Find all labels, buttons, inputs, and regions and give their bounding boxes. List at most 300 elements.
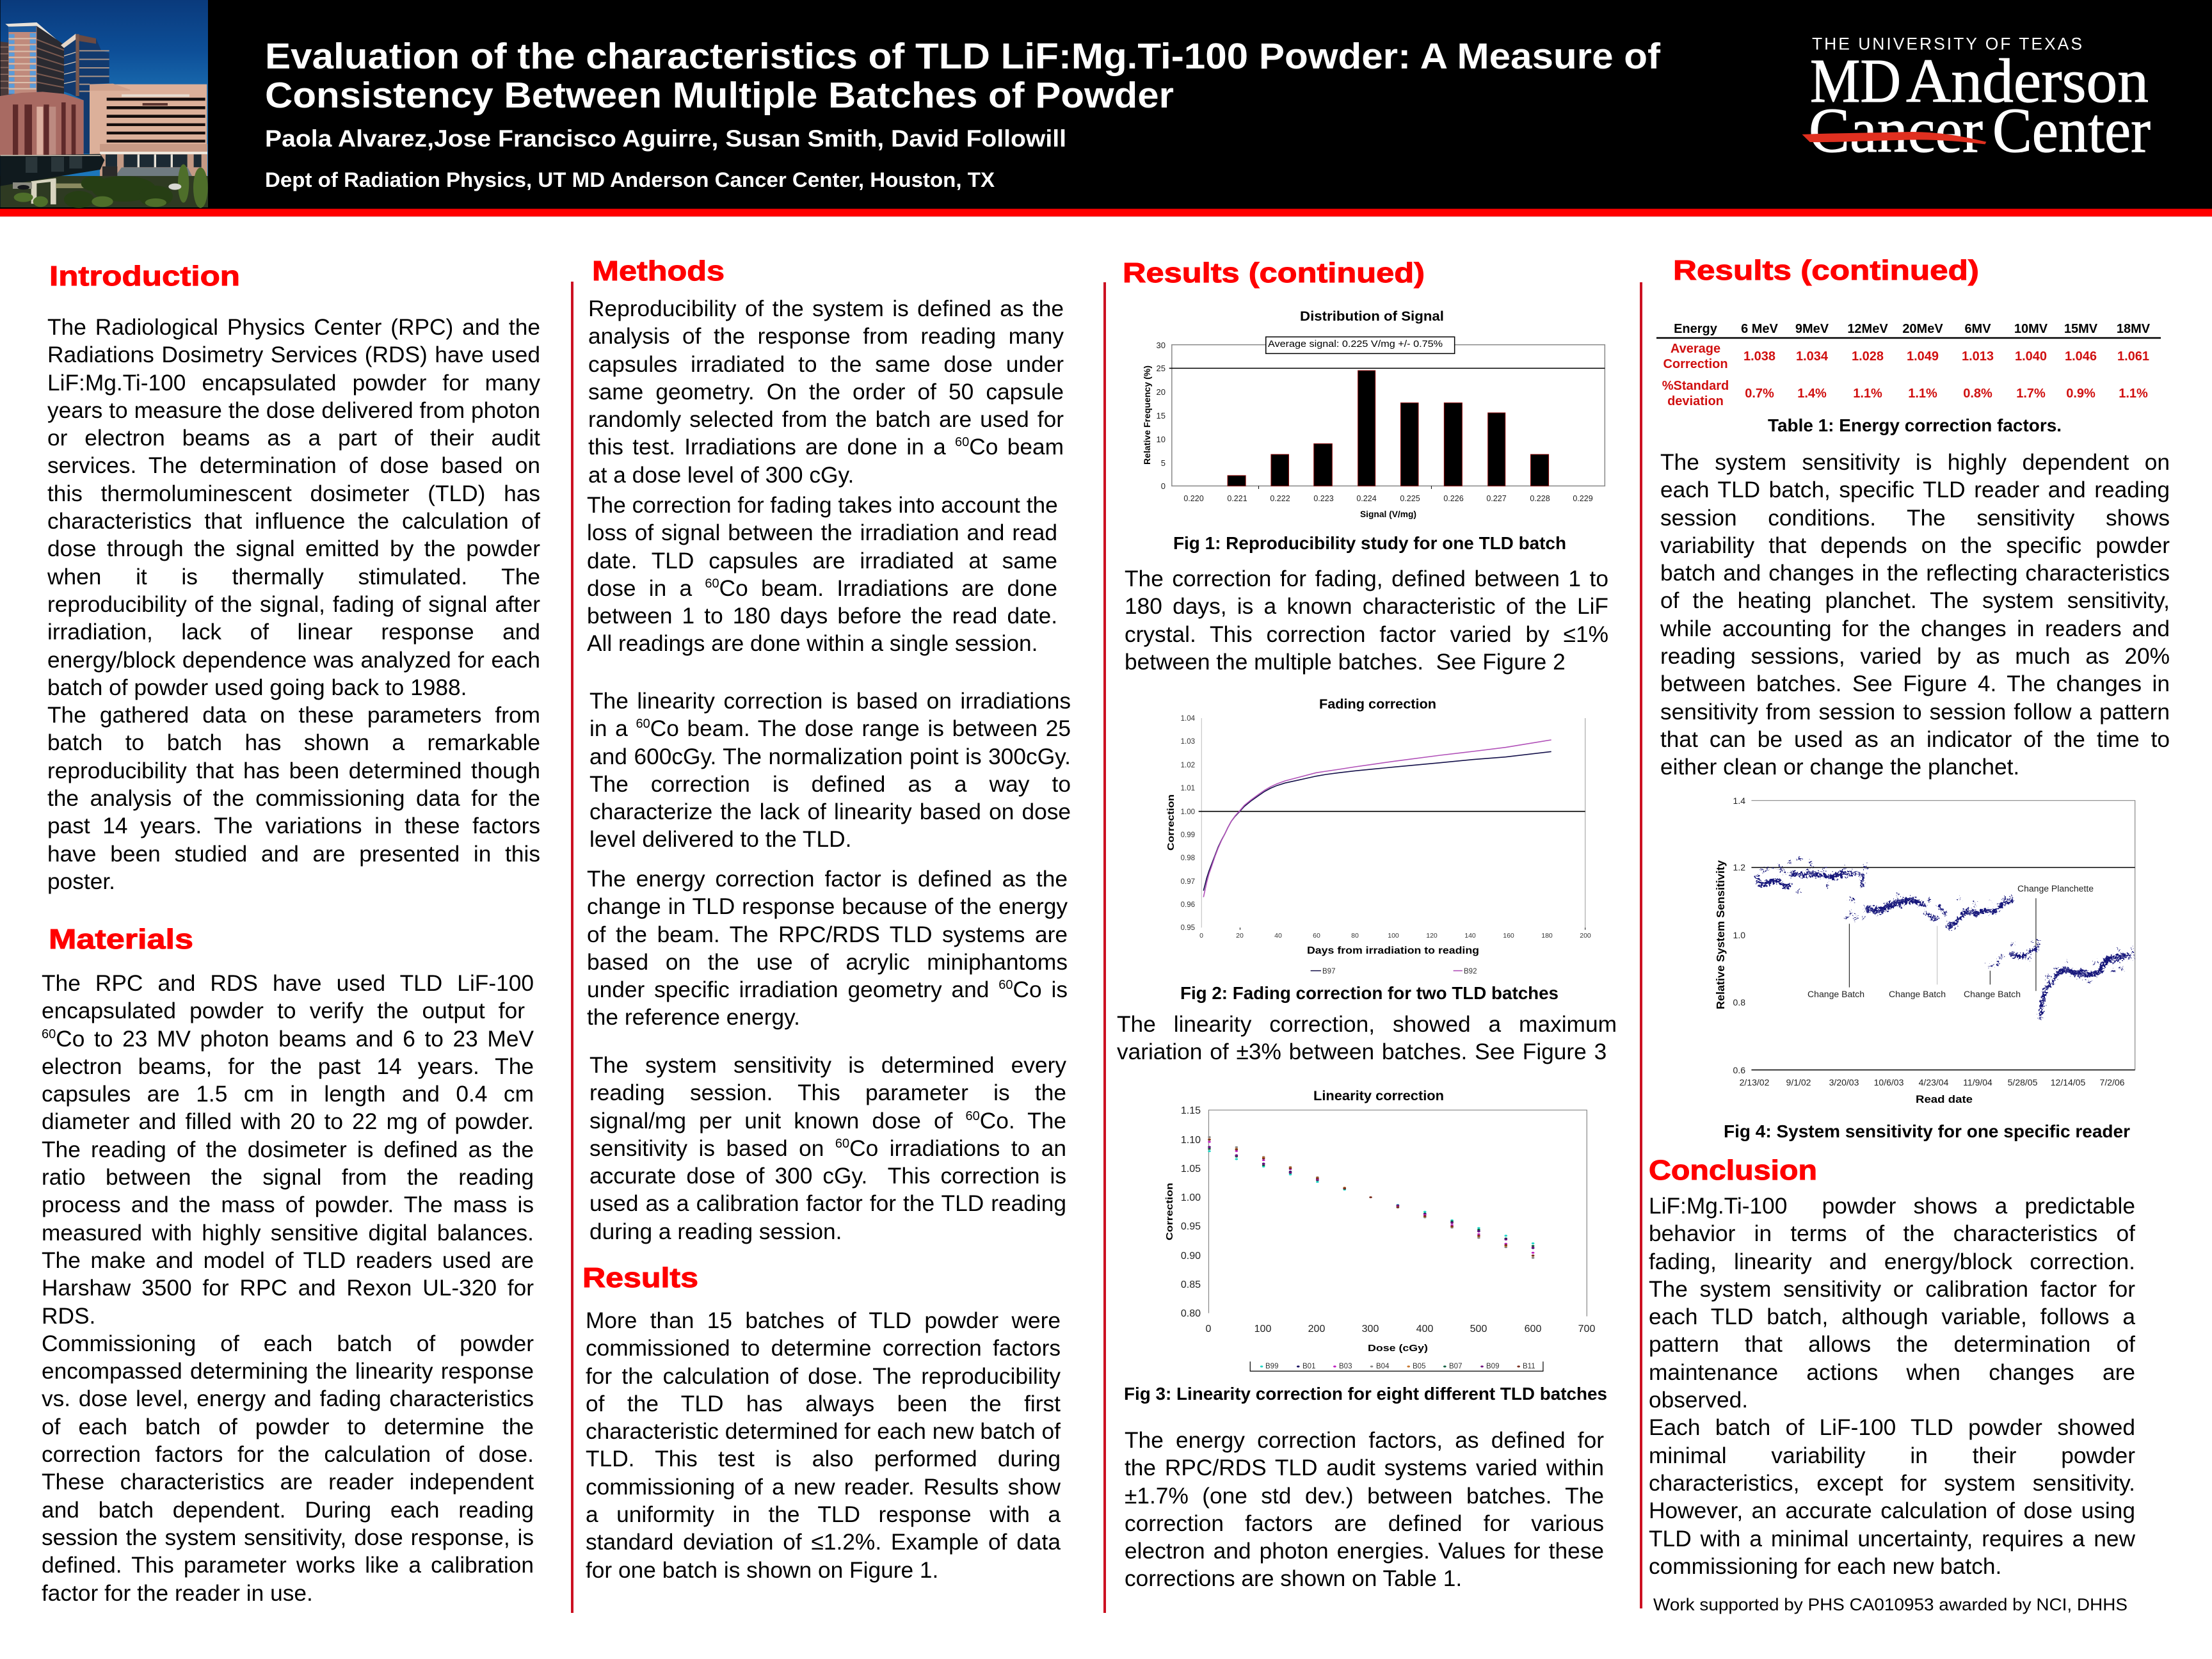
text: materials: The reading of the dosimeter is defined as the [42,1137,534,1162]
x axis labels: 20 [1236,932,1244,940]
x axis labels: 180 [1541,932,1553,940]
text: results: commissioning of a new reader. Results show [586,1475,1061,1500]
y axis labels: 15 [1157,411,1166,421]
text: energy correction note: The energy correction factors, as defined for [1125,1428,1604,1453]
text: methods, linearity: and 600cGy. The normalization point is 300cGy. [589,744,1071,769]
caption: Fig 1: Reproducibility study for one TLD batch [1173,533,1566,553]
row: percent standard deviation: 1.1% [1853,387,1882,401]
text: methods, sensitivity: accurate dose of 300 cGy. This correction is [589,1164,1066,1189]
row: percent standard deviation [1662,379,2148,408]
y axis labels: 30 [1157,341,1166,350]
footer: funding acknowledgement: Work supported by PHS CA010953 awarded by NCI, DHHS [1653,1595,2128,1614]
text: materials [42,971,534,1606]
heading: Methods: Methods [592,255,725,287]
x axis labels: 2/13/02 [1740,1077,1770,1087]
y axis labels: 1.00 [1181,808,1195,816]
table header: Energy [1674,322,1718,336]
title: Evaluation of the characteristics of TLD LiF:Mg.Ti-100 Powder: A Measure of [265,36,1661,77]
text: methods, sensitivity: during a reading session. [589,1219,842,1244]
text: system sensitivity: each TLD batch, specific TLD reader and reading [1660,477,2170,502]
y axis labels [1181,1105,1201,1319]
logo: MD Anderson Cancer Center [1802,35,2151,166]
chart title: Linearity correction [1313,1089,1444,1103]
text: methods, energy correction: of the beam. The RPC/RDS TLD systems are [587,922,1068,947]
header band [0,0,2212,209]
text: conclusion: LiF:Mg.Ti-100 powder shows a predictable [1649,1194,2135,1219]
x axis labels: 120 [1426,932,1438,940]
annotations: Change Batch [1807,990,1864,999]
text: methods, reproducibility: same geometry. On the order of 50 capsule [588,380,1064,405]
x axis labels [1740,1077,2125,1087]
legend [1322,968,1477,975]
row: percent standard deviation: deviation [1667,394,1724,408]
y axis labels: 1.4 [1733,796,1745,806]
row: average correction: 1.040 [2015,349,2047,364]
axis titles [1142,365,1416,519]
text: introduction: batch of powder used going back to 1988. [47,675,467,700]
text: methods, reproducibility: analysis of the response from reading many [588,324,1064,349]
legend: B01 [1302,1363,1315,1370]
x axis labels: 80 [1351,932,1359,940]
legend: B92 [1464,968,1477,975]
text: methods, sensitivity: The system sensitivity is determined every [589,1053,1066,1078]
text: results: for the calculation of dose. The reproducibility [586,1364,1061,1389]
text: conclusion: TLD with a minimal uncertainty, requires a new [1649,1527,2135,1551]
legend: B04 [1376,1363,1390,1370]
heading: Results (continued), column 3: Results (continued) [1123,257,1425,289]
affiliation: Dept of Radiation Physics, UT MD Anderson Cancer Center, Houston, TX [265,168,995,191]
logo: MD Anderson Cancer Center: Center [1992,95,2151,166]
divider: column 3 / 4 [1640,282,1642,1608]
x axis labels: 60 [1313,932,1320,940]
text: methods, linearity: characterize the lack of linearity based on dose [589,799,1071,824]
text: methods, linearity: in a 60Co beam. The dose range is between 25 [589,716,1071,741]
text: materials: process and the mass of powder. The mass is [42,1192,534,1217]
text: system sensitivity: sensitivity from session to session follow a pattern [1660,700,2170,725]
text: methods, fading: All readings are done within a single session. [587,631,1038,656]
x axis labels [1183,494,1593,503]
text: introduction: dose through the signal emitted by the powder [47,536,540,561]
legend: B07 [1449,1363,1462,1370]
text: system sensitivity: session conditions. The sensitivity shows [1660,506,2170,531]
chart: figure 3 linearity correction [1124,1089,1607,1404]
text: energy correction note: electron and photon energies. Values for these [1125,1539,1604,1564]
legend: B05 [1413,1363,1425,1370]
x axis labels: 7/2/06 [2100,1077,2125,1087]
x axis labels: 5/28/05 [2008,1077,2038,1087]
text: introduction: have been studied and are presented in this [47,842,540,867]
text: conclusion: characteristics, except for system sensitivity. [1649,1471,2135,1496]
x axis labels: 160 [1503,932,1514,940]
y axis labels: 1.10 [1181,1135,1201,1146]
text: methods, energy correction: change in TLD response because of the energy [587,894,1068,919]
text: introduction: poster. [47,869,115,894]
text: fading correction note: 180 days, is a known characteristic of the LiF [1125,594,1608,619]
text: materials: The RPC and RDS have used TLD LiF-100 [42,971,534,996]
text: methods, fading: The correction for fading takes into account the [587,493,1058,518]
data points [1757,859,2133,1018]
row: percent standard deviation: 0.8% [1963,387,1992,401]
x axis labels: 0.223 [1313,494,1334,503]
table header: 9MeV [1795,322,1829,336]
text: methods, reproducibility: this test. Irradiations are done in a 60Co beam [588,435,1064,460]
row: percent standard deviation: 1.4% [1797,387,1827,401]
x axis labels: 40 [1274,932,1282,940]
chart: figure 2 fading correction [1166,697,1591,1003]
text: materials: electron beams, for the past 14 years. The [42,1054,534,1079]
table header: 12MeV [1847,322,1888,336]
text: system sensitivity: either clean or change the planchet. [1660,755,2019,780]
x axis labels: 0 [1206,1324,1212,1334]
y axis labels: 10 [1157,435,1166,444]
axis titles [1164,1183,1428,1354]
text: introduction: characteristics that influence the calculation of [47,509,540,534]
x axis labels: 200 [1580,932,1591,940]
row: average correction: 1.046 [2065,349,2097,364]
text: methods, energy correction: based on the use of acrylic miniphantoms [587,950,1068,975]
header text: title and authors [265,36,1661,191]
text: system sensitivity: reading sessions, varied by as much as 20% [1660,644,2170,669]
legend: B03 [1339,1363,1352,1370]
table caption: Table 1: Energy correction factors. [1768,415,2062,435]
text: methods, fading [587,493,1058,656]
axis titles: Relative System Sensitivity [1714,860,1727,1009]
text: system sensitivity: while accounting for the changes in readers and [1660,616,2170,641]
chart: figure 4 system sensitivity [1709,794,2157,1146]
x axis labels: 0.228 [1530,494,1550,503]
text: materials: These characteristics are reader independent [42,1470,534,1495]
legend [1265,1363,1535,1370]
y axis labels: 1.0 [1733,930,1745,940]
logo: MD Anderson Cancer Center: Cancer [1809,95,1983,166]
row: average correction: 1.049 [1907,349,1939,364]
text: conclusion: pattern that allows the determination of [1649,1332,2135,1357]
divider: column 2 / 3 [1103,282,1106,1613]
row: average correction: 1.013 [1962,349,1994,364]
text: introduction: when it is thermally stimulated. The [47,565,540,589]
x axis labels [1206,1324,1595,1334]
data points [1209,1137,1533,1366]
title [265,36,1661,116]
text: conclusion: behavior in terms of the characteristics of [1649,1221,2135,1246]
text: methods, fading: loss of signal between the irradiation and read [587,520,1057,545]
x axis labels: 4/23/04 [1919,1077,1949,1087]
authors: Paola Alvarez,Jose Francisco Aguirre, Susan Smith, David Followill [265,125,1066,152]
text: materials: correction factors for the calculation of dose. [42,1442,534,1467]
text: methods, energy correction [587,867,1068,1030]
text: conclusion: commissioning for each new batch. [1649,1554,2001,1579]
text: conclusion [1649,1192,2135,1580]
text: fading correction note: The correction for fading, defined between 1 to [1125,566,1608,591]
y axis labels: 0.99 [1181,831,1195,839]
y axis labels: 1.03 [1181,738,1195,746]
text: introduction: past 14 years. The variations in these factors [47,813,540,838]
x axis labels: 9/1/02 [1786,1077,1811,1087]
annotations: Change Planchette [2017,884,2094,894]
text: materials: Commissioning of each batch of powder [42,1331,534,1356]
y axis labels: 0.95 [1181,924,1195,932]
text: materials: and batch dependent. During each reading [42,1498,534,1523]
text: energy correction note: corrections are shown on Table 1. [1125,1566,1462,1591]
text: system sensitivity: batch and changes in the reflecting characteristics [1660,561,2170,586]
legend: B09 [1486,1363,1499,1370]
text: methods, linearity: The correction is defined as a way to [589,772,1071,797]
text: results [586,1308,1061,1583]
y axis labels: 0.6 [1733,1065,1745,1075]
annotations: Change Batch [1889,990,1946,999]
text: materials: vs. dose level, energy and fading characteristics [42,1386,534,1411]
text: methods, linearity: The linearity correction is based on irradiations [589,689,1071,714]
annotation: Average signal: 0.225 V/mg +/- 0.75% [1268,339,1443,349]
table header: 18MV [2117,322,2151,336]
text: introduction: this thermoluminescent dosimeter (TLD) has [47,481,540,506]
text: methods, reproducibility [588,296,1064,488]
x axis labels: 0.229 [1573,494,1593,503]
row: average correction [1663,342,2149,371]
row: average correction: 1.034 [1796,349,1829,364]
text: methods, linearity [589,689,1071,852]
text: results: of the TLD has always been the first [586,1391,1061,1416]
x axis labels: 0.227 [1486,494,1507,503]
text: materials: The make and model of TLD readers used are [42,1248,534,1273]
axis titles: Correction [1166,794,1176,851]
x axis labels: 10/6/03 [1874,1077,1904,1087]
y axis labels [1733,796,1745,1075]
text: conclusion: observed. [1649,1388,1748,1413]
text: introduction: the analysis of the commissioning data for the [47,786,540,811]
text: conclusion: However, an accurate calculation of dose using [1649,1498,2135,1523]
axis titles: Read date [1916,1093,1973,1105]
axis titles: Signal (V/mg) [1360,509,1416,519]
axis titles: Relative Frequency (%) [1142,365,1152,465]
x axis labels: 100 [1388,932,1399,940]
text: methods, sensitivity: reading session. This parameter is the [589,1080,1066,1105]
text: fading correction note: between the multiple batches. See Figure 2 [1125,650,1566,675]
x axis labels: 0.222 [1270,494,1290,503]
text: materials: session the system sensitivity, dose response, is [42,1525,534,1550]
y axis labels: 25 [1157,364,1166,373]
x axis labels: 11/9/04 [1963,1077,1992,1087]
row: percent standard deviation: 1.1% [2119,387,2148,401]
axis titles [1714,860,1973,1105]
text: energy correction note: the RPC/RDS TLD audit systems varied within [1125,1455,1604,1480]
table header: 15MV [2064,322,2098,336]
header red stripe [0,209,2212,217]
x axis labels: 3/20/03 [1829,1077,1859,1087]
y axis labels: 1.02 [1181,762,1195,769]
table header: 10MV [2014,322,2048,336]
y axis labels: 0.90 [1181,1251,1201,1262]
y axis labels: 0.85 [1181,1279,1201,1290]
text: system sensitivity: of the heating planchet. The system sensitivity, [1660,588,2170,613]
text: fading correction note: crystal. This correction factor varied by ≤1% [1125,622,1608,647]
text: methods, energy correction: under specific irradiation geometry and 60Co is [587,977,1068,1002]
text: methods, reproducibility: randomly selected from the batch are used for [588,407,1064,432]
text: methods, energy correction: The energy correction factor is defined as the [587,867,1068,892]
text: introduction: batch to batch has shown a remarkable [47,730,540,755]
text: methods, sensitivity: sensitivity is based on 60Co irradiations to an [589,1136,1066,1161]
y axis labels: 0.97 [1181,878,1195,886]
chart: figure 1 distribution of signal [1142,309,1605,553]
text: methods, linearity: level delivered to the TLD. [589,827,851,852]
text: results: commissioned to determine correction factors [586,1336,1061,1361]
title: Consistency Between Multiple Batches of Powder [265,75,1174,116]
text: materials: encompassed determining the linearity response [42,1359,534,1384]
text: introduction: energy/block dependence was analyzed for each [47,648,540,673]
logo: MD Anderson Cancer Center: MD [1810,47,1901,116]
row: percent standard deviation: 0.7% [1745,387,1774,401]
text: materials: defined. This parameter works like a calibration [42,1553,534,1578]
text: conclusion: each TLD batch, although variable, follows a [1649,1304,2135,1329]
x axis labels: 700 [1578,1324,1595,1334]
text: methods, fading: date. TLD capsules are irradiated at same [587,549,1057,573]
text: introduction: reproducibility that has been determined though [47,758,540,783]
text: methods, sensitivity: signal/mg per unit known dose of 60Co. The [589,1109,1066,1134]
table: energy correction factors [1651,317,2170,438]
row: average correction: 1.028 [1852,349,1884,364]
y axis labels [1181,715,1196,932]
axis titles: Days from irradiation to reading [1307,945,1479,956]
row: average correction: 1.061 [2117,349,2149,364]
text: materials: measured with highly sensitive digital balances. [42,1221,534,1246]
text: introduction: The gathered data on these parameters from [47,703,540,728]
chart title: Distribution of Signal [1300,309,1444,324]
text: results: for one batch is shown on Figure 1. [586,1558,938,1583]
y axis labels: 1.05 [1181,1164,1201,1174]
axis titles: Dose (cGy) [1368,1343,1428,1354]
annotations [1807,884,2094,999]
y axis labels: 0.80 [1181,1308,1201,1319]
y axis labels: 0 [1161,481,1166,491]
row: average correction: Average [1671,342,1720,356]
y axis labels: 1.00 [1181,1192,1201,1203]
x axis labels: 0.226 [1443,494,1464,503]
x axis labels: 0.225 [1400,494,1420,503]
text: methods, fading: between 1 to 180 days before the read date. [587,604,1057,629]
text: methods, reproducibility: at a dose level of 300 cGy. [588,463,854,488]
row: average correction: 1.038 [1743,349,1775,364]
x axis labels: 100 [1254,1324,1271,1334]
row: percent standard deviation: 1.7% [2016,387,2046,401]
text: introduction [47,315,540,894]
y axis labels: 0.96 [1181,901,1195,909]
text: materials: of each batch of powder to determine the [42,1415,534,1439]
chart title: Fading correction [1319,697,1436,712]
text: introduction: services. The determination of dose based on [47,453,540,478]
text: results: More than 15 batches of TLD powder were [586,1308,1061,1333]
text: conclusion: minimal variability in their powder [1649,1443,2135,1468]
y axis labels: 0.95 [1181,1221,1201,1232]
text: methods, reproducibility: Reproducibility of the system is defined as the [588,296,1064,321]
text: system sensitivity: variability that depends on the specific powder [1660,533,2170,558]
legend: B97 [1322,968,1335,975]
text: introduction: or electron beams as a part of their audit [47,426,540,451]
y axis labels: 5 [1161,458,1166,468]
text: materials: diameter and filled with 20 to 22 mg of powder. [42,1109,534,1134]
text: results: standard deviation of ≤1.2%. Example of data [586,1530,1061,1555]
text: materials: ratio between the signal from the reading [42,1165,534,1190]
x axis labels: 300 [1362,1324,1379,1334]
y axis labels: 0.8 [1733,997,1745,1007]
heading: Results (continued), column 4: Results (continued) [1673,255,1979,286]
text: introduction: LiF:Mg.Ti-100 encapsulated powder for many [47,371,540,396]
text: introduction: Radiations Dosimetry Services (RDS) have used [47,342,540,367]
text: introduction: The Radiological Physics Center (RPC) and the [47,315,540,340]
text: materials: 60Co to 23 MV photon beams and 6 to 23 MeV [42,1027,534,1052]
y axis labels: 0.98 [1181,854,1195,862]
divider: column 1 / 2 [571,282,573,1613]
x axis labels: 400 [1416,1324,1433,1334]
text: methods, reproducibility: capsules irradiated to the same dose under [588,352,1064,377]
text: materials: capsules are 1.5 cm in length and 0.4 cm [42,1082,534,1107]
legend: B11 [1523,1363,1535,1370]
row: average correction: Correction [1663,357,1728,371]
heading: Materials: Materials [49,924,193,955]
y axis labels: 1.2 [1733,862,1745,872]
x axis labels: 500 [1470,1324,1487,1334]
row: percent standard deviation: %Standard [1662,379,1729,393]
y axis labels: 1.04 [1181,715,1196,723]
text: materials: RDS. [42,1304,95,1329]
text: methods, sensitivity [589,1053,1066,1244]
legend: B99 [1265,1363,1278,1370]
axis titles [1166,794,1479,956]
text: energy correction note: correction factors are defined for various [1125,1511,1604,1536]
text: conclusion: maintenance actions when changes are [1649,1360,2135,1385]
text: materials: factor for the reader in use. [42,1581,313,1606]
caption: Fig 4: System sensitivity for one specific reader [1724,1121,2130,1141]
text: system sensitivity: The system sensitivity is highly dependent on [1660,450,2170,475]
x axis labels: 12/14/05 [2051,1077,2085,1087]
text: linearity correction note [1117,1012,1617,1064]
text: materials: encapsulated powder to verify the output for [42,998,525,1023]
text: fading correction note [1125,566,1608,675]
axis titles: Correction [1164,1183,1175,1240]
text: system sensitivity: that can be used as an indicator of the time to [1660,727,2170,752]
photo: MD Anderson campus buildings [0,0,208,208]
y axis labels: 20 [1157,387,1166,397]
x axis labels: 600 [1525,1324,1541,1334]
text: materials: Harshaw 3500 for RPC and Rexon UL-320 for [42,1276,534,1301]
heading: Introduction: Introduction [49,260,240,292]
row: percent standard deviation: 0.9% [2066,387,2096,401]
caption: Fig 2: Fading correction for two TLD batches [1180,983,1559,1003]
text: introduction: reproducibility of the signal, fading of signal after [47,592,540,617]
y axis labels: 1.01 [1181,785,1195,792]
text: methods, sensitivity: used as a calibration factor for the TLD reading [589,1191,1066,1216]
table header [1674,322,2151,336]
table header: 6MV [1964,322,1991,336]
text: energy correction note: ±1.7% (one std dev.) between batches. The [1125,1484,1604,1509]
logo: MD Anderson Cancer Center: Anderson [1906,47,2149,116]
x axis labels: 0.224 [1356,494,1377,503]
caption: Fig 3: Linearity correction for eight different TLD batches [1124,1384,1607,1404]
logo: MD Anderson Cancer Center: THE UNIVERSITY OF TEXAS [1812,35,2082,54]
text: methods, fading: dose in a 60Co beam. Irradiations are done [587,576,1057,601]
text: energy correction note [1125,1428,1604,1591]
row: percent standard deviation: 1.1% [1908,387,1937,401]
y axis labels [1157,341,1166,491]
heading: Results: Results [582,1262,698,1294]
x axis labels: 0.220 [1183,494,1204,503]
text: introduction: years to measure the dose delivered from photon [47,398,540,423]
text: conclusion: The system sensitivity or calibration factor for [1649,1277,2135,1302]
text: results: a uniformity in the TLD response with a [586,1502,1061,1527]
y axis labels: 1.15 [1181,1105,1201,1116]
table header: 20MeV [1902,322,1943,336]
x axis labels: 0 [1199,932,1203,940]
text: introduction: irradiation, lack of linear response and [47,620,540,645]
